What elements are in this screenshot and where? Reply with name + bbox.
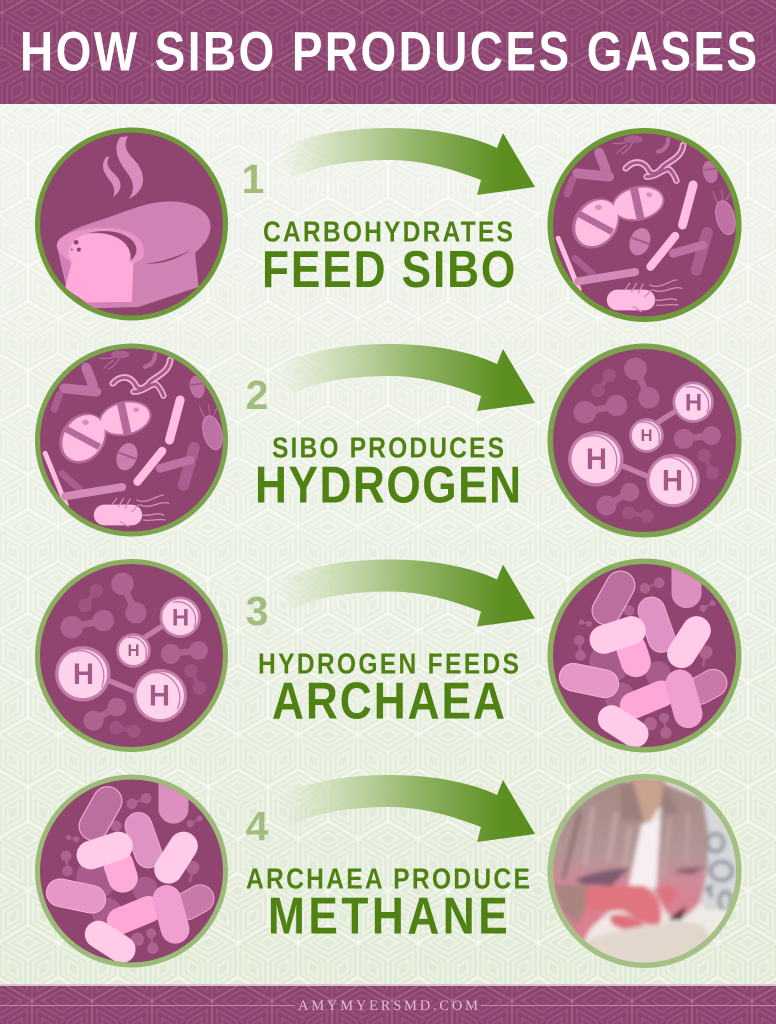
step number 3: 3: [246, 588, 268, 634]
caption 1: FEED SIBO: [262, 241, 515, 299]
icon: hydrogen circle: H: [73, 658, 94, 691]
right shirt panel: [653, 783, 708, 916]
caption 4: [246, 863, 530, 945]
row 3: hydrogen feeds archaea: [35, 558, 742, 752]
lower fingers: [610, 914, 646, 931]
row 2: SIBO produces hydrogen: [35, 344, 742, 538]
row 4: archaea produce methane: [35, 769, 750, 976]
collar: [621, 780, 679, 821]
icon: hydrogen circle: H: [127, 641, 140, 660]
caption 1: [262, 216, 515, 299]
pillow: [700, 804, 736, 910]
icon: archaea circle: [35, 774, 228, 968]
caption 2: HYDROGEN: [255, 456, 521, 514]
caption 1: CARBOHYDRATES: [263, 216, 513, 248]
caption 4: METHANE: [268, 887, 508, 945]
icon: hydrogen circle: H: [172, 605, 189, 632]
right shirt highlights: [663, 813, 688, 879]
shirt hem: [592, 908, 672, 927]
icon: archaea circle: [548, 558, 742, 752]
t-shirt: [628, 819, 660, 888]
footer website text: AMYMYERSMD.COM: [298, 998, 478, 1014]
icon: hydrogen circle: H: [149, 679, 170, 712]
icon: bread circle: [35, 128, 228, 320]
shirt highlights: [585, 806, 630, 869]
icon: hydrogen circle: H: [640, 426, 653, 445]
arrow 3: [272, 560, 535, 626]
cuff: [554, 884, 590, 926]
header banner: [0, 0, 776, 104]
dark fold: [575, 868, 630, 886]
far forearm: [658, 885, 677, 906]
pillow flowers: [705, 834, 732, 910]
caption 2: SIBO PRODUCES: [272, 432, 504, 464]
icon: hydrogen circle: [35, 559, 228, 752]
photo: woman holding her stomach: [548, 774, 742, 968]
arrow 2: [272, 344, 535, 411]
row 1: carbohydrates feed SIBO: [35, 128, 742, 322]
step number 1: 1: [242, 156, 264, 202]
caption 3: ARCHAEA: [272, 672, 505, 730]
step number 4: 4: [246, 803, 269, 849]
sleeve shadow: [563, 813, 580, 879]
footer banner: [0, 984, 776, 1024]
icon: hydrogen circle: H: [586, 443, 607, 476]
caption 4: ARCHAEA PRODUCE: [246, 863, 530, 895]
icon: bacteria circle: [548, 128, 742, 322]
sofa: [708, 906, 728, 916]
arrow 1: [272, 128, 535, 195]
icon: hydrogen circle: [548, 344, 742, 538]
arm and hand: [586, 885, 661, 926]
icon: hydrogen circle: H: [662, 464, 683, 497]
icon: hydrogen circle: H: [685, 390, 702, 417]
caption 3: HYDROGEN FEEDS: [258, 648, 519, 680]
left shirt panel: [543, 779, 645, 943]
title: HOW SIBO PRODUCES GASES: [20, 20, 757, 83]
right dark fold: [676, 867, 705, 874]
icon: bacteria circle: [35, 344, 228, 536]
shadow near hand: [667, 905, 686, 920]
step number 2: 2: [246, 372, 268, 418]
trousers: [586, 922, 710, 962]
neck: [630, 776, 666, 826]
arrow 4: [272, 775, 535, 842]
caption 3: [258, 648, 519, 730]
